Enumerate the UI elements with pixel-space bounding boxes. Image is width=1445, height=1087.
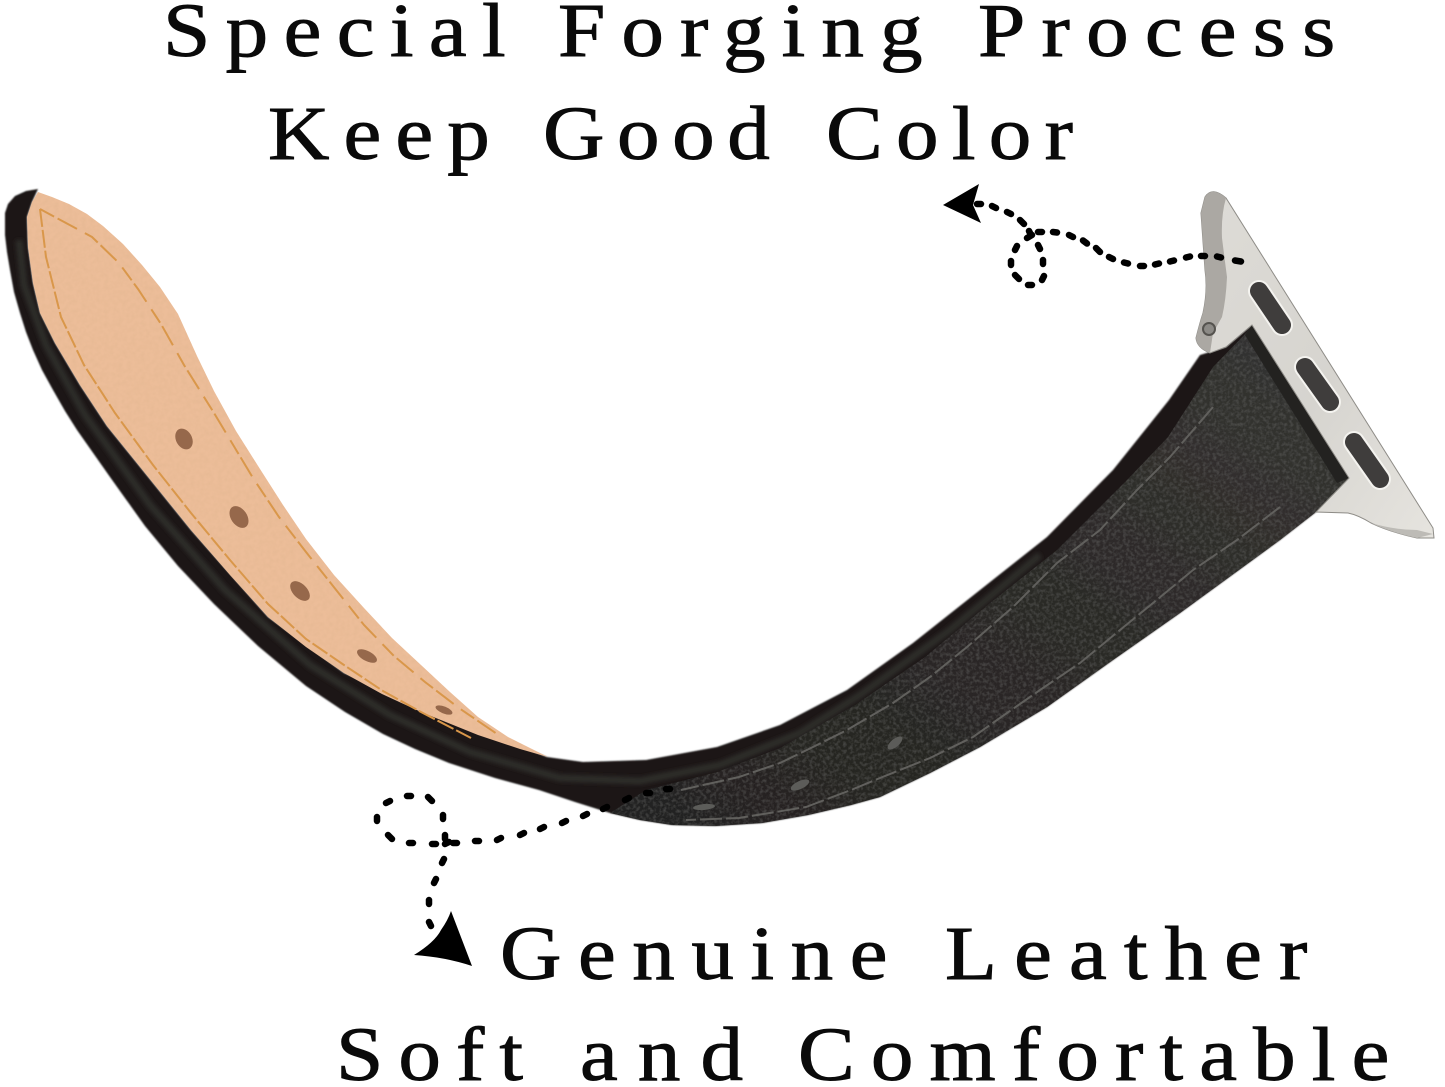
tan stitching lower — [40, 209, 471, 738]
black leather edge of band — [5, 189, 1349, 826]
arrowhead bottom — [414, 911, 472, 966]
heading: special forging process, keep good color: Keep — [268, 92, 490, 176]
lug body — [1196, 192, 1434, 538]
dark leather strap face — [610, 325, 1349, 826]
heading: special forging process, keep good color: Color — [826, 92, 1073, 176]
caption: genuine leather, soft and comfortable — [336, 912, 1389, 1087]
strap stitching lower — [686, 507, 1280, 820]
lug tip shading — [1371, 523, 1433, 538]
dotted arrow: lug to heading — [943, 184, 1241, 285]
strap holes — [693, 734, 904, 811]
watch band — [5, 189, 1349, 826]
edge highlight on black band — [19, 240, 1040, 781]
buckle holes — [172, 426, 454, 717]
dotted arrow: strap to leather caption — [377, 789, 670, 966]
arrowhead top — [943, 184, 981, 223]
heading: special forging process, keep good color — [163, 0, 1335, 176]
tan stitching upper — [40, 209, 497, 734]
dotted curve bottom — [377, 789, 670, 926]
heading: special forging process, keep good color: Good — [543, 92, 770, 176]
caption: genuine leather, soft and comfortable: Genuine — [500, 912, 887, 996]
dotted curve top — [977, 204, 1241, 285]
screw — [1203, 323, 1215, 335]
caption: genuine leather, soft and comfortable: Leather — [945, 912, 1308, 996]
metal connector lug — [1196, 192, 1434, 538]
connector pills — [1259, 291, 1380, 479]
strap end strip — [1245, 325, 1349, 483]
tan underside of band — [27, 192, 548, 757]
lug side shading — [1196, 192, 1227, 353]
strap stitching upper — [681, 407, 1213, 790]
